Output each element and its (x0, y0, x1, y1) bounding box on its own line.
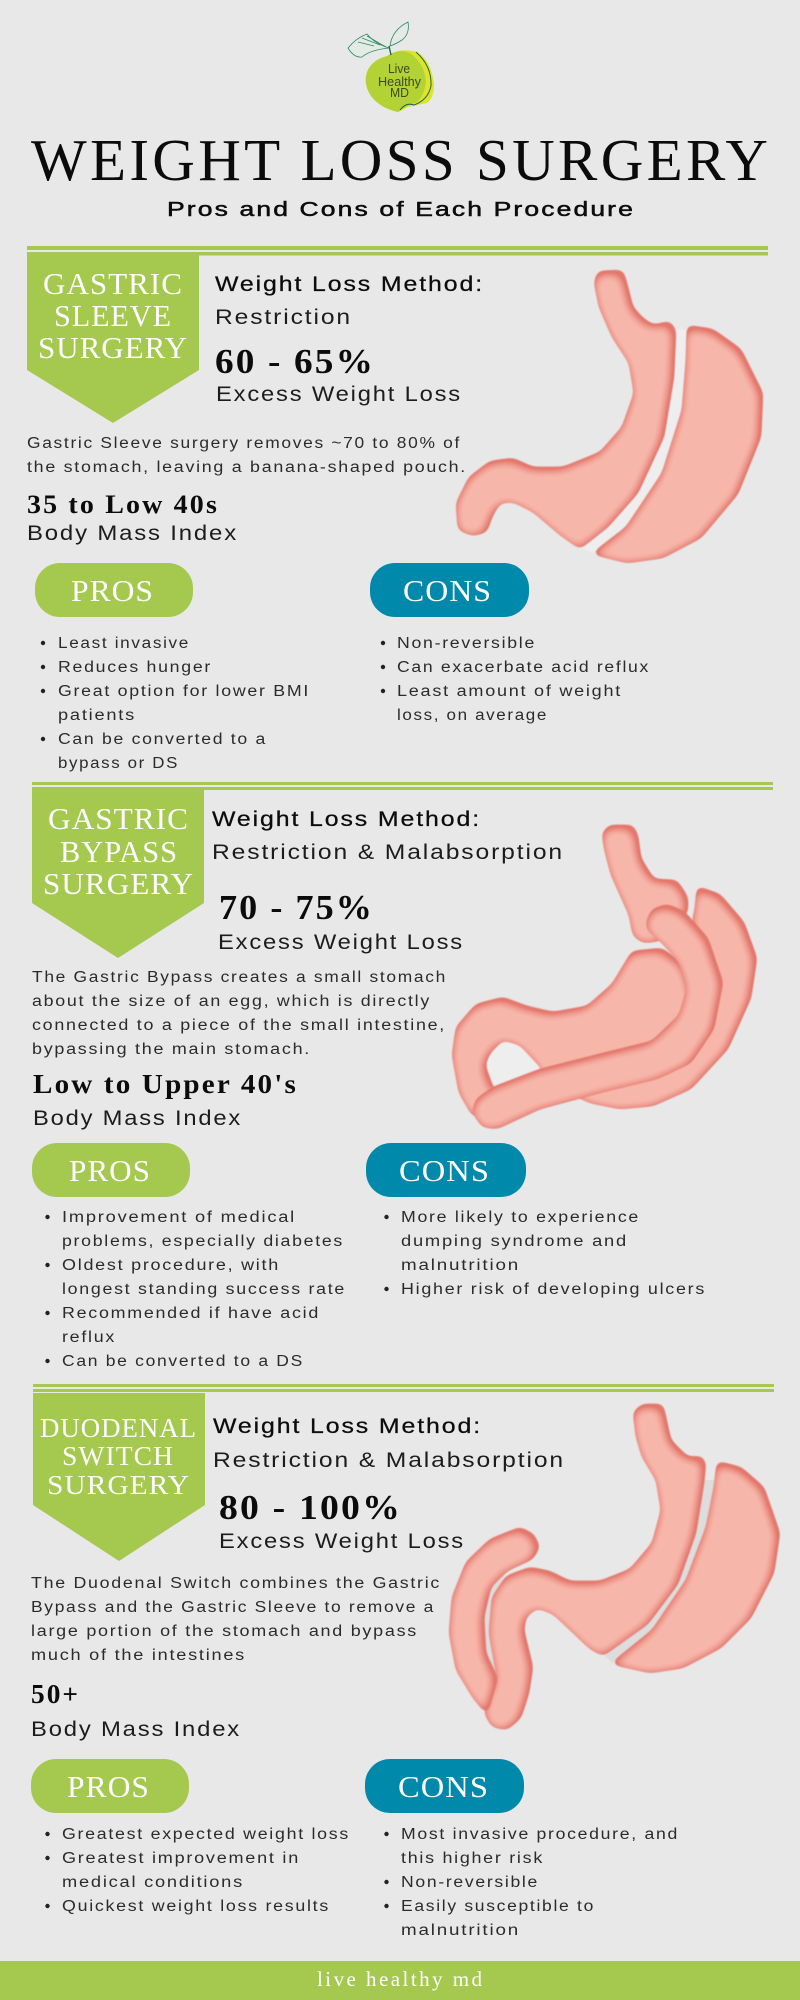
excess weight loss stat (218, 888, 464, 954)
pros list: problems, especially diabetes (62, 1233, 344, 1250)
cons list: malnutrition (401, 1257, 520, 1274)
excess weight loss stat (219, 1488, 465, 1553)
logo: apple with leaf (348, 22, 434, 112)
description: Gastric Sleeve surgery removes ~70 to 80% of (27, 435, 461, 452)
pros list: bypass or DS (58, 755, 179, 772)
pros pill (32, 1143, 190, 1197)
description: much of the intestines (31, 1647, 246, 1664)
excess weight loss stat: 60 - 65% (215, 342, 375, 381)
illustration: sleeve stomach (456, 270, 763, 563)
bmi range: Body Mass Index (33, 1107, 242, 1130)
excess weight loss stat: Excess Weight Loss (218, 931, 464, 954)
weight loss method: Weight Loss Method: (212, 808, 481, 831)
illustration: duodenal switch stomach (449, 1404, 780, 1730)
excess weight loss stat (215, 342, 462, 406)
heading badge: gastric sleeve: SLEEVE (54, 298, 172, 333)
pros list: Recommended if have acid (62, 1305, 320, 1322)
panel: gastric bypass surgery (32, 782, 773, 1370)
pros list: Least invasive (58, 635, 190, 652)
cons list: Higher risk of developing ulcers (401, 1281, 706, 1298)
footer bar (0, 1961, 800, 2000)
pros list: Greatest improvement in (62, 1850, 300, 1867)
bmi range (27, 490, 238, 545)
cons list: Least amount of weight (397, 683, 622, 700)
bmi range: 50+ (31, 1679, 80, 1709)
cons pill: CONS (399, 1153, 490, 1188)
footer bar: live healthy md (317, 1967, 482, 1991)
description: The Duodenal Switch combines the Gastric (31, 1575, 441, 1592)
cons list: Non-reversible (401, 1874, 539, 1891)
pros list: Oldest procedure, with (62, 1257, 280, 1274)
bmi range (33, 1069, 298, 1130)
illustration: bypass stomach (452, 825, 757, 1129)
pros list (45, 1826, 350, 1915)
bmi range: Body Mass Index (27, 522, 238, 545)
excess weight loss stat: 70 - 75% (219, 888, 374, 927)
pros list: Greatest expected weight loss (62, 1826, 350, 1843)
pros list: Quickest weight loss results (62, 1898, 330, 1915)
heading badge: duodenal switch: SURGERY (47, 1470, 190, 1500)
logo: apple with leaf: Live (388, 62, 410, 76)
pros pill: PROS (71, 573, 154, 608)
bmi range: 35 to Low 40s (27, 490, 219, 519)
pros pill: PROS (69, 1153, 151, 1188)
heading badge: gastric sleeve (27, 255, 199, 423)
logo: apple with leaf: MD (390, 86, 409, 100)
pros list: Can be converted to a (58, 731, 267, 748)
description (27, 435, 467, 476)
pros list: Improvement of medical (62, 1209, 296, 1226)
cons list (384, 1826, 679, 1939)
heading badge: gastric bypass: SURGERY (43, 866, 194, 901)
cons list: Non-reversible (397, 635, 536, 652)
cons list: Easily susceptible to (401, 1898, 595, 1915)
bmi range (31, 1679, 241, 1741)
weight loss method (213, 1415, 565, 1472)
heading badge: duodenal switch (33, 1393, 205, 1561)
cons list (384, 1209, 706, 1298)
heading badge: duodenal switch: SWITCH (62, 1441, 174, 1471)
pros list: Great option for lower BMI (58, 683, 310, 700)
heading badge: gastric sleeve: GASTRIC (43, 266, 183, 301)
pros list (41, 635, 310, 772)
pros list: Can be converted to a DS (62, 1353, 304, 1370)
cons list: Can exacerbate acid reflux (397, 659, 650, 676)
description: Bypass and the Gastric Sleeve to remove a (31, 1599, 435, 1616)
pros pill: PROS (67, 1769, 150, 1804)
excess weight loss stat: Excess Weight Loss (216, 383, 462, 406)
heading badge: gastric bypass: BYPASS (60, 834, 178, 869)
cons pill (370, 563, 529, 617)
cons pill: CONS (398, 1769, 489, 1804)
cons pill: CONS (403, 573, 492, 608)
cons list: loss, on average (397, 707, 548, 724)
weight loss method: Restriction & Malabsorption (213, 1449, 565, 1472)
heading badge: gastric bypass: GASTRIC (48, 801, 189, 836)
cons list: dumping syndrome and (401, 1233, 628, 1250)
cons pill (366, 1143, 526, 1197)
excess weight loss stat: 80 - 100% (219, 1488, 402, 1527)
pros pill (31, 1759, 189, 1813)
weight loss method: Weight Loss Method: (213, 1415, 482, 1438)
bmi range: Low to Upper 40's (33, 1069, 298, 1099)
cons list: this higher risk (401, 1850, 544, 1867)
cons pill (365, 1759, 524, 1813)
cons list: malnutrition (401, 1922, 520, 1939)
pros pill (35, 563, 193, 617)
heading badge: gastric bypass (32, 790, 204, 958)
description (31, 1575, 441, 1664)
title: WEIGHT LOSS SURGERY (31, 127, 768, 193)
subtitle: Pros and Cons of Each Procedure (167, 199, 635, 221)
description: large portion of the stomach and bypass (31, 1623, 418, 1640)
description: the stomach, leaving a banana-shaped pouch. (27, 459, 467, 476)
description: connected to a piece of the small intestine, (32, 1017, 446, 1034)
pros list: patients (58, 707, 136, 724)
description: The Gastric Bypass creates a small stomach (32, 969, 447, 986)
weight loss method (212, 808, 564, 864)
pros list: Reduces hunger (58, 659, 212, 676)
description (32, 969, 447, 1058)
description: bypassing the main stomach. (32, 1041, 311, 1058)
weight loss method: Weight Loss Method: (215, 273, 484, 296)
excess weight loss stat: Excess Weight Loss (219, 1530, 465, 1553)
pros list: longest standing success rate (62, 1281, 346, 1298)
pros list: medical conditions (62, 1874, 244, 1891)
cons list: More likely to experience (401, 1209, 640, 1226)
heading badge: duodenal switch: DUODENAL (40, 1413, 197, 1443)
cons list (381, 635, 650, 724)
pros list: reflux (62, 1329, 116, 1346)
weight loss method (215, 273, 484, 329)
description: about the size of an egg, which is directly (32, 993, 431, 1010)
cons list: Most invasive procedure, and (401, 1826, 679, 1843)
weight loss method: Restriction & Malabsorption (212, 841, 564, 864)
pros list (45, 1209, 346, 1370)
bmi range: Body Mass Index (31, 1718, 241, 1741)
weight loss method: Restriction (215, 306, 352, 329)
panel: duodenal switch surgery (31, 1384, 780, 1939)
logo: apple with leaf: Healthy (378, 75, 422, 89)
panel: gastric sleeve surgery (27, 246, 768, 772)
heading badge: gastric sleeve: SURGERY (38, 330, 188, 365)
